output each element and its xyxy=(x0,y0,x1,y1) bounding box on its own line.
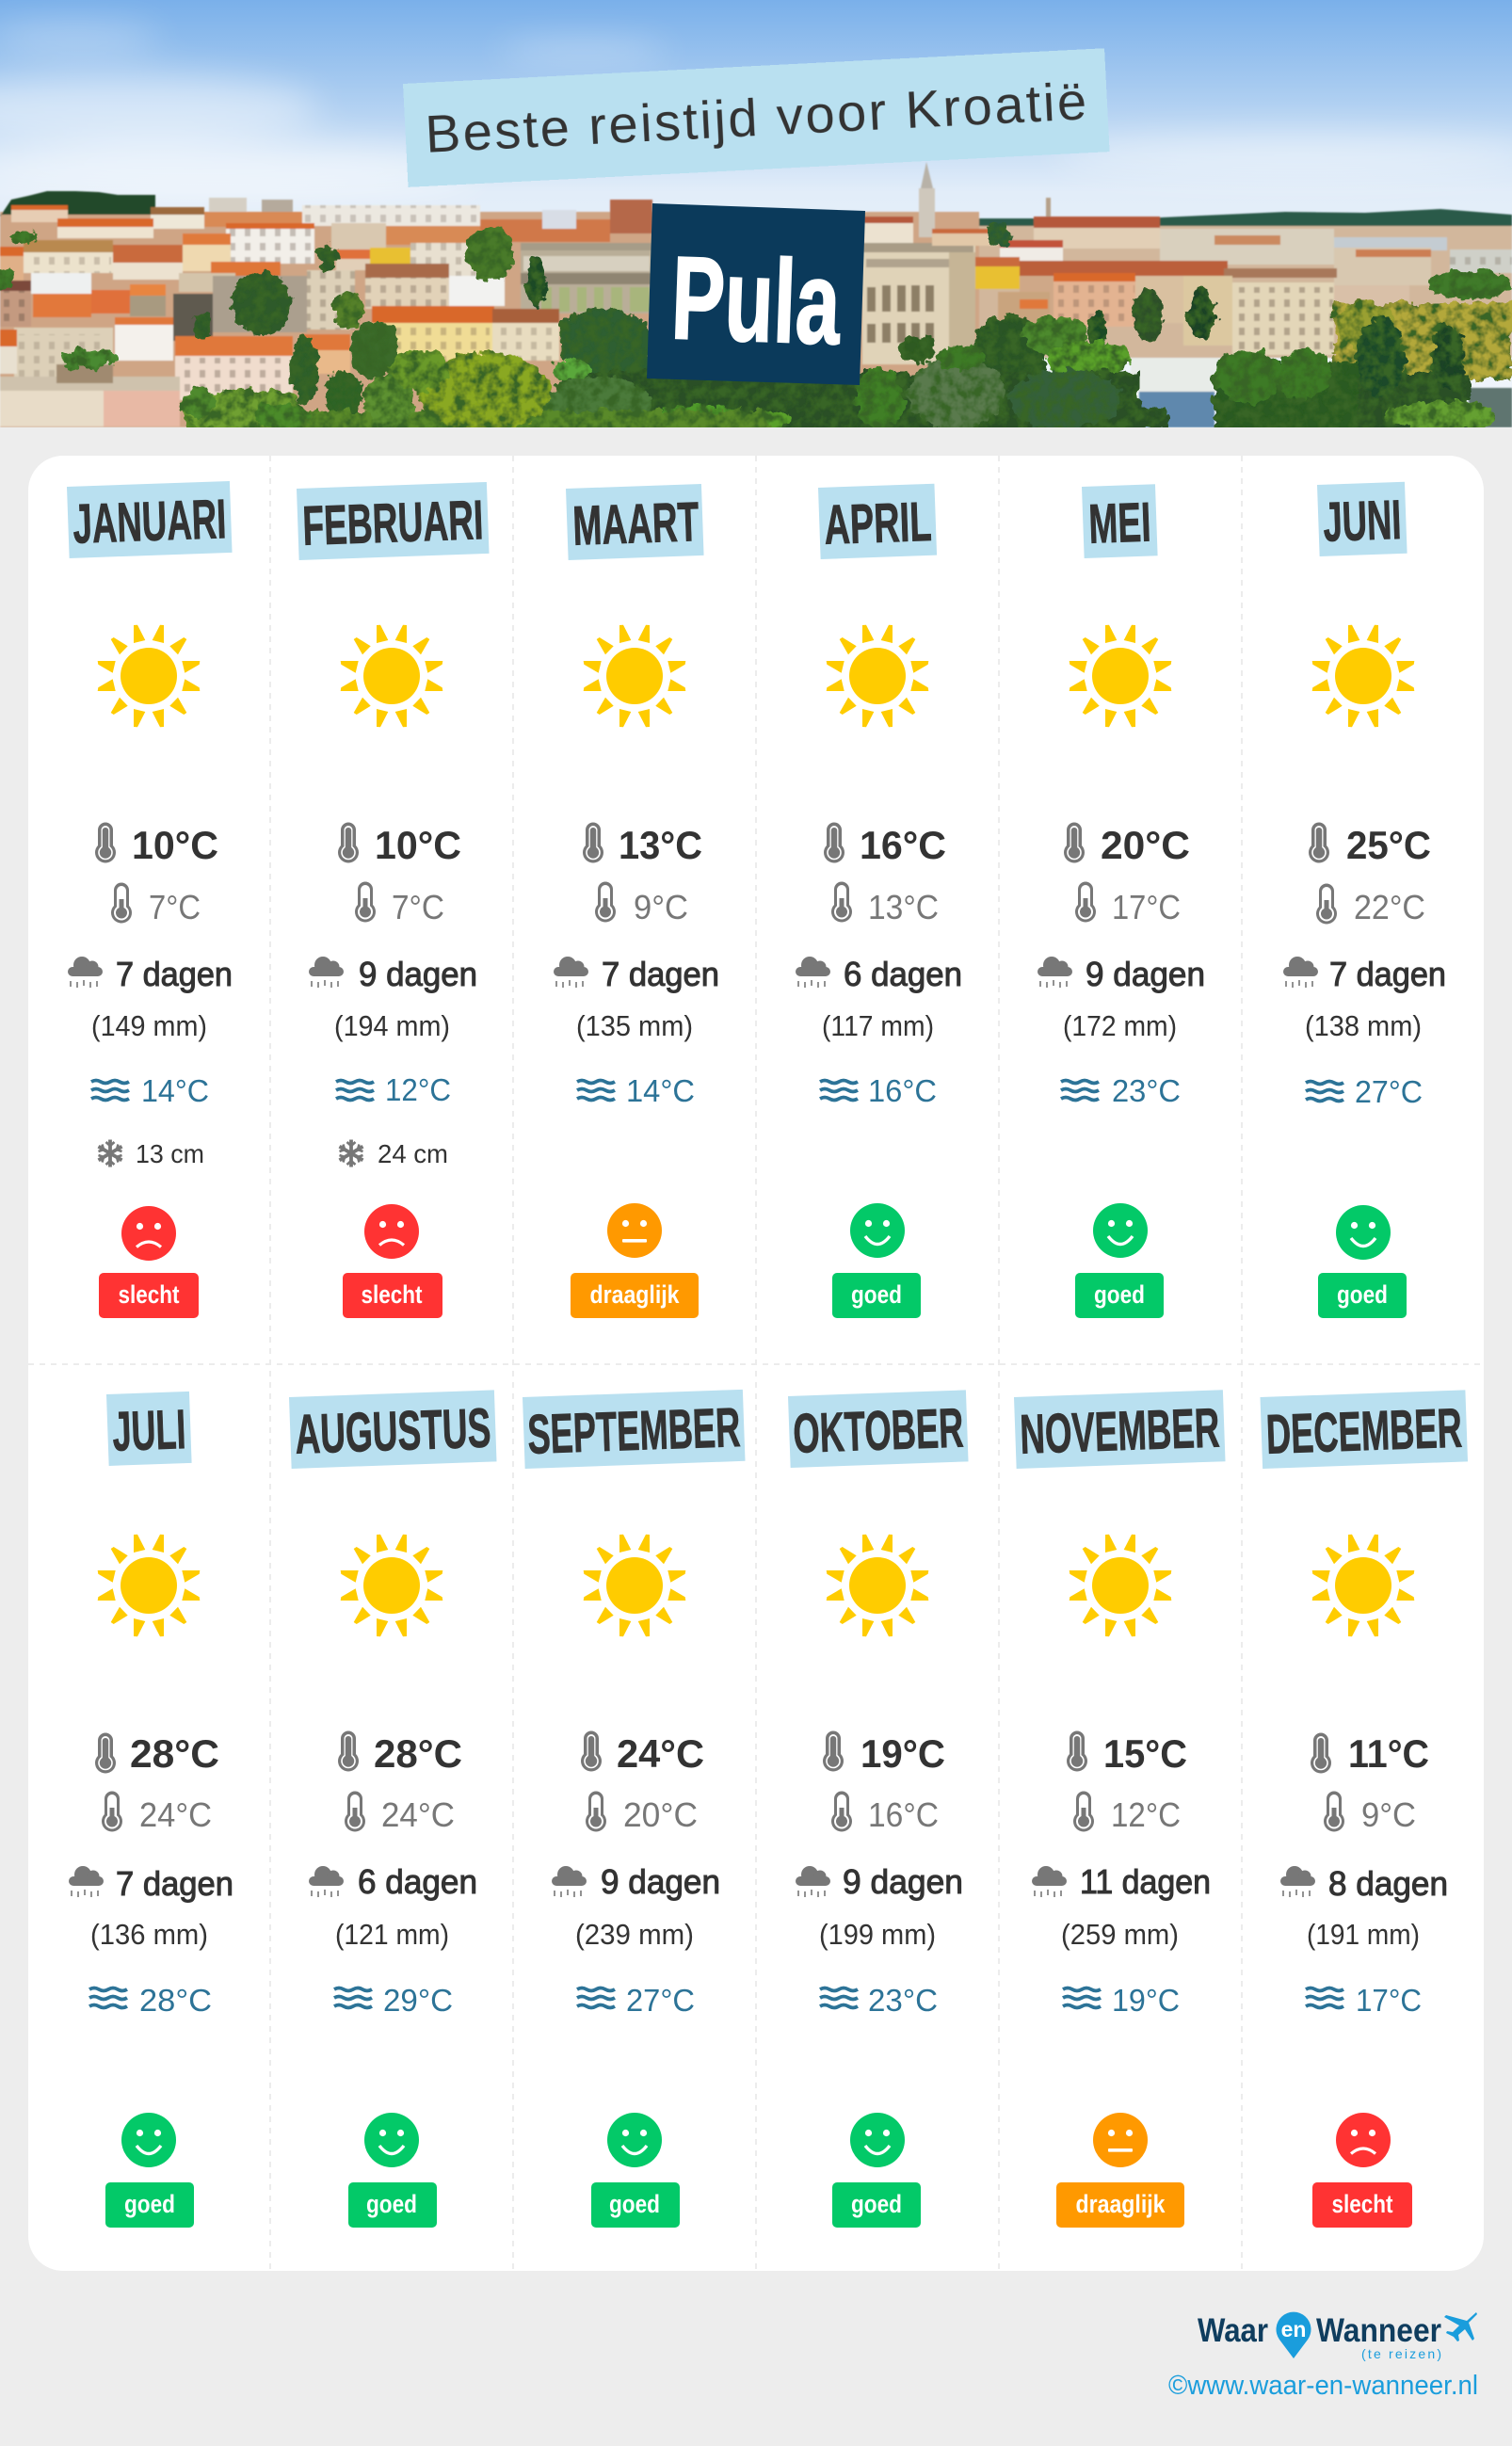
min temperature: 7°C xyxy=(149,888,201,926)
icon: sun xyxy=(827,1535,928,1636)
snow: 24 cm xyxy=(378,1139,448,1168)
sea temperature: 23°C xyxy=(868,1983,938,2018)
heading: maart: MAART xyxy=(571,491,700,557)
panel: september xyxy=(523,1390,746,2228)
rainfall: (259 mm) xyxy=(1061,1918,1179,1951)
rain days: 7 dagen xyxy=(1329,955,1446,993)
panel: juni xyxy=(1283,482,1446,1318)
max temperature: 20°C xyxy=(1101,823,1190,867)
snow xyxy=(339,1139,448,1168)
sea temperature: 27°C xyxy=(626,1983,695,2018)
rating badge: goed xyxy=(851,1280,902,1309)
rain days xyxy=(796,955,962,993)
rating face xyxy=(121,1206,176,1261)
sea temperature xyxy=(1061,1073,1181,1108)
min temperature xyxy=(345,1791,455,1834)
sea temperature: 17°C xyxy=(1356,1983,1422,2018)
rainfall: (194 mm) xyxy=(334,1009,450,1042)
rating badge: draaglijk xyxy=(1075,2190,1166,2218)
min temperature: 20°C xyxy=(623,1795,698,1834)
sea temperature: 16°C xyxy=(868,1073,937,1108)
rating face xyxy=(1093,2113,1148,2167)
logo: Waar en Wanneer xyxy=(1198,2312,1477,2361)
rating face xyxy=(1336,2113,1391,2167)
rating badge xyxy=(1075,1273,1164,1318)
rainfall: (117 mm) xyxy=(822,1009,934,1042)
rating badge: goed xyxy=(851,2190,902,2218)
heading: februari: FEBRUARI xyxy=(301,489,484,557)
heading: augustus: AUGUSTUS xyxy=(294,1397,491,1466)
max temperature xyxy=(338,823,461,867)
rating badge: goed xyxy=(1094,1280,1145,1309)
panel: augustus xyxy=(289,1390,497,2228)
rain days: 7 dagen xyxy=(602,955,719,993)
heading: april xyxy=(818,484,937,559)
rainfall: (136 mm) xyxy=(90,1918,208,1951)
photo lower edge xyxy=(0,427,1512,446)
rating face xyxy=(850,2113,905,2167)
panel: oktober xyxy=(788,1390,969,2228)
icon: sun xyxy=(341,1535,442,1636)
min temperature: 9°C xyxy=(1361,1795,1416,1834)
rating face xyxy=(607,1203,662,1258)
heading: juli xyxy=(106,1392,192,1466)
sea temperature: 19°C xyxy=(1112,1983,1180,2018)
icon: sun xyxy=(584,625,685,727)
max temperature xyxy=(583,823,702,867)
sea temperature xyxy=(820,1073,937,1108)
icon: sun xyxy=(1070,625,1171,727)
min temperature: 7°C xyxy=(392,888,444,926)
heading: september xyxy=(523,1390,746,1469)
rating badge: slecht xyxy=(1331,2190,1393,2218)
sea temperature: 27°C xyxy=(1355,1074,1423,1109)
icon: sun xyxy=(1312,625,1414,727)
heading: oktober: OKTOBER xyxy=(792,1397,964,1465)
min temperature: 16°C xyxy=(868,1795,939,1834)
heading: januari: JANUARI xyxy=(72,488,227,555)
rating badge xyxy=(832,1273,921,1318)
max temperature xyxy=(1067,1730,1187,1776)
town xyxy=(0,162,1512,427)
min temperature xyxy=(1316,883,1425,926)
rating badge: slecht xyxy=(362,1280,422,1309)
icon: map pin xyxy=(1277,2312,1311,2358)
snow: 13 cm xyxy=(136,1139,204,1168)
rain days: 9 dagen xyxy=(843,1862,963,1901)
panel: december xyxy=(1260,1390,1468,2228)
max temperature xyxy=(1064,823,1190,867)
rating face xyxy=(364,1204,419,1259)
rain days: 6 dagen xyxy=(844,955,962,993)
panel: november xyxy=(1014,1390,1226,2228)
city name: Pula xyxy=(669,233,844,369)
rain days xyxy=(1283,955,1446,993)
heading: oktober xyxy=(788,1390,969,1468)
max temperature: 15°C xyxy=(1103,1731,1187,1776)
rating badge xyxy=(832,2182,921,2228)
min temperature: 22°C xyxy=(1354,888,1425,926)
rain days xyxy=(554,955,719,993)
max temperature xyxy=(1309,823,1431,867)
snow xyxy=(98,1139,204,1168)
heading: september: SEPTEMBER xyxy=(526,1396,741,1466)
max temperature: 25°C xyxy=(1346,823,1431,867)
rainfall: (138 mm) xyxy=(1305,1009,1422,1042)
max temperature xyxy=(823,1730,945,1776)
title banner xyxy=(403,48,1110,187)
panel: februari xyxy=(297,482,490,1318)
logo: Waar en Wanneer: Waar xyxy=(1198,2312,1268,2349)
max temperature xyxy=(1311,1731,1429,1776)
logo: Waar en Wanneer: (te reizen) xyxy=(1361,2346,1441,2361)
rating badge xyxy=(1318,1273,1407,1318)
sea temperature xyxy=(334,1983,453,2018)
rainfall: (199 mm) xyxy=(819,1918,936,1951)
rating badge xyxy=(571,1273,699,1318)
min temperature: 12°C xyxy=(1111,1795,1181,1834)
icon: map pin: en xyxy=(1281,2317,1306,2341)
heading: juli: JULI xyxy=(111,1398,186,1463)
sea temperature: 12°C xyxy=(385,1072,451,1107)
rating badge: slecht xyxy=(119,1280,179,1309)
rating badge: goed xyxy=(1337,1280,1388,1309)
rain days xyxy=(309,1862,477,1901)
heading: januari xyxy=(67,481,233,558)
sea temperature xyxy=(1306,1983,1422,2018)
rainfall: (149 mm) xyxy=(91,1009,207,1042)
rain days: 6 dagen xyxy=(358,1862,477,1901)
rain days: 8 dagen xyxy=(1328,1864,1448,1903)
amphitheatre right side xyxy=(862,245,975,364)
sky xyxy=(0,0,1512,427)
sea temperature xyxy=(336,1072,451,1107)
icon: sun xyxy=(827,625,928,727)
rainfall: (191 mm) xyxy=(1307,1918,1420,1951)
heading: april: APRIL xyxy=(823,491,932,556)
panel: juli xyxy=(69,1392,233,2228)
min temperature xyxy=(831,881,939,926)
sea temperature: 28°C xyxy=(139,1983,212,2018)
sea temperature: 29°C xyxy=(383,1983,453,2018)
title text: Beste reistijd voor Kroatië xyxy=(424,71,1087,164)
panel: mei xyxy=(1037,484,1205,1318)
heading: juni xyxy=(1317,482,1407,556)
min temperature xyxy=(1073,1791,1181,1834)
rainfall: (121 mm) xyxy=(335,1918,449,1951)
min temperature: 13°C xyxy=(868,888,939,926)
icon: sun xyxy=(584,1535,685,1636)
sea temperature xyxy=(91,1073,209,1108)
rain days: 9 dagen xyxy=(1086,955,1205,993)
rain days: 11 dagen xyxy=(1080,1862,1211,1901)
panel: april xyxy=(796,484,962,1318)
max temperature: 28°C xyxy=(374,1731,462,1776)
rating badge xyxy=(591,2182,680,2228)
heading: mei xyxy=(1082,484,1158,558)
heading: maart xyxy=(566,484,704,560)
rating badge xyxy=(348,2182,437,2228)
max temperature: 10°C xyxy=(375,823,461,867)
icon: sun xyxy=(1312,1535,1414,1636)
sea temperature xyxy=(820,1983,938,2018)
rating badge xyxy=(1056,2182,1184,2228)
logo: Waar en Wanneer: Wanneer xyxy=(1316,2312,1441,2349)
max temperature: 28°C xyxy=(130,1731,219,1776)
min temperature xyxy=(1324,1791,1416,1834)
heading: november xyxy=(1014,1390,1226,1469)
rain days xyxy=(68,955,233,993)
panel: white climate card xyxy=(28,456,1484,2271)
min temperature: 17°C xyxy=(1112,888,1181,926)
sea temperature: 14°C xyxy=(626,1073,695,1108)
website url: ©www.waar-en-wanneer.nl xyxy=(1168,2371,1478,2401)
min temperature xyxy=(586,1791,698,1834)
sea temperature xyxy=(1306,1074,1423,1109)
heading: november: NOVEMBER xyxy=(1019,1396,1220,1466)
rating badge xyxy=(105,2182,194,2228)
min temperature: 24°C xyxy=(139,1795,212,1834)
rain days: 9 dagen xyxy=(359,955,477,993)
panel: januari xyxy=(67,481,233,1318)
max temperature xyxy=(581,1730,704,1776)
max temperature xyxy=(95,823,218,867)
rainfall: (135 mm) xyxy=(576,1009,693,1042)
rating badge xyxy=(1312,2182,1412,2228)
min temperature xyxy=(1075,881,1181,926)
heading: mei: MEI xyxy=(1087,491,1152,555)
rainfall: (239 mm) xyxy=(575,1918,694,1951)
icon: sun xyxy=(341,625,442,727)
rain days xyxy=(69,1864,233,1903)
min temperature xyxy=(595,881,688,926)
rain days xyxy=(309,955,477,993)
rain days: 9 dagen xyxy=(601,1862,720,1901)
max temperature: 13°C xyxy=(619,823,702,867)
photo: Pula skyline with sky, town, amphitheatre and trees xyxy=(0,0,1512,446)
trees xyxy=(0,224,1512,433)
clouds xyxy=(0,23,1512,198)
min temperature xyxy=(111,883,201,926)
rating badge xyxy=(99,1273,199,1318)
min temperature: 9°C xyxy=(634,888,688,926)
rain days: 7 dagen xyxy=(116,955,233,993)
sea temperature xyxy=(89,1983,212,2018)
max temperature: 11°C xyxy=(1348,1731,1429,1776)
city label box xyxy=(647,203,865,385)
icon: airplane xyxy=(1444,2312,1477,2341)
icon: sun xyxy=(98,625,200,727)
min temperature: 24°C xyxy=(381,1795,455,1834)
heading: juni: JUNI xyxy=(1322,489,1402,554)
panel: maart xyxy=(554,484,719,1318)
rating badge xyxy=(343,1273,442,1318)
rating badge: goed xyxy=(609,2190,660,2218)
icon: sun xyxy=(1070,1535,1171,1636)
min temperature xyxy=(355,881,444,926)
rating face xyxy=(1336,1205,1391,1260)
heading: augustus xyxy=(289,1390,497,1469)
sea temperature: 23°C xyxy=(1112,1073,1181,1108)
rain days xyxy=(552,1862,720,1901)
min temperature xyxy=(831,1791,939,1834)
sea temperature xyxy=(577,1073,695,1108)
rating badge: draaglijk xyxy=(589,1280,680,1309)
rainfall: (172 mm) xyxy=(1063,1009,1177,1042)
sea temperature xyxy=(577,1983,695,2018)
rating face xyxy=(607,2113,662,2167)
min temperature xyxy=(102,1791,212,1834)
rain days: 7 dagen xyxy=(116,1864,233,1903)
rating face xyxy=(850,1203,905,1258)
max temperature: 16°C xyxy=(860,823,946,867)
rating face xyxy=(1093,1203,1148,1258)
icon: sun xyxy=(98,1535,200,1636)
rating badge: goed xyxy=(124,2190,175,2218)
rating face xyxy=(364,2113,419,2167)
max temperature xyxy=(824,823,946,867)
sea temperature xyxy=(1063,1983,1180,2018)
max temperature: 10°C xyxy=(132,823,218,867)
rating face xyxy=(121,2113,176,2167)
sea temperature: 14°C xyxy=(141,1073,209,1108)
heading: februari xyxy=(297,482,490,560)
max temperature: 19°C xyxy=(861,1731,945,1776)
max temperature: 24°C xyxy=(617,1731,704,1776)
rating badge: goed xyxy=(366,2190,417,2218)
